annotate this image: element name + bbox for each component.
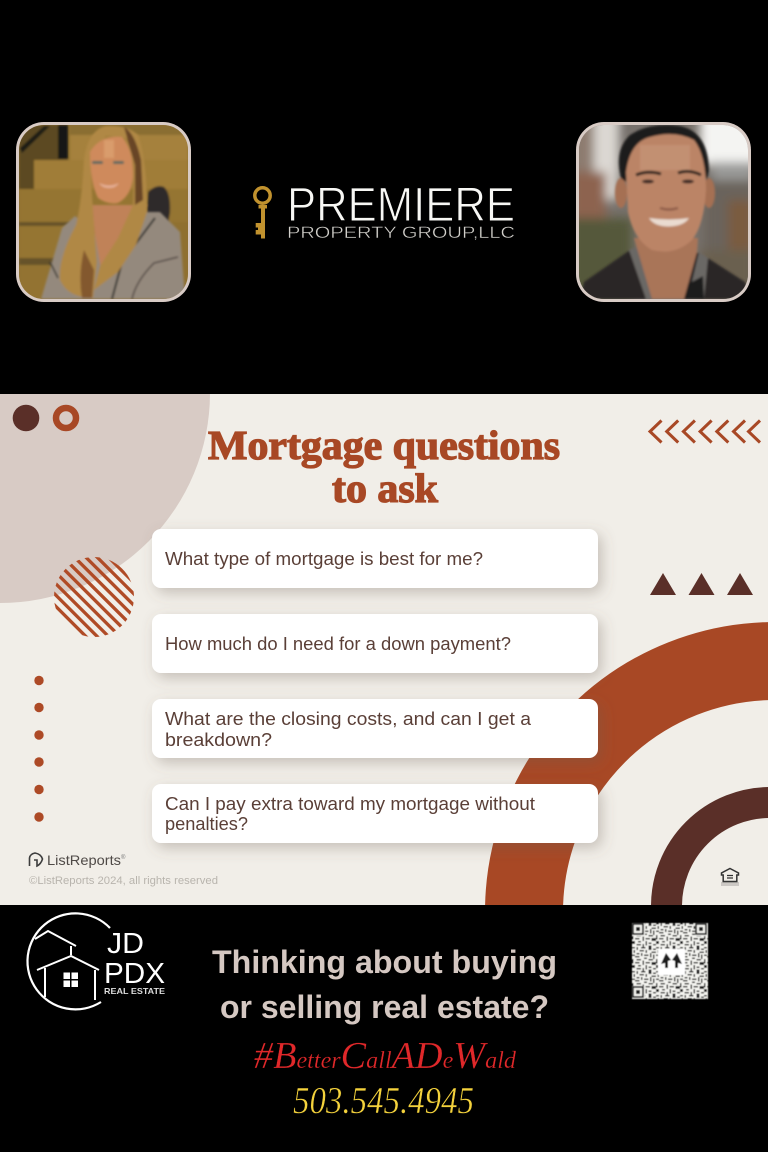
ListReports brand: ® [121,854,126,861]
question card 3: breakdown? [165,730,272,750]
decoration: ring [56,408,76,428]
sweater [41,212,185,299]
question card 4 [152,784,598,843]
phone number: 503.545.4945 [293,1080,474,1122]
logo: JD PDX Real Estate: PDX [104,958,165,990]
logo: Premiere Property Group: PROPERTY GROUP,LLC [287,224,515,242]
question card 4: penalties? [165,814,248,834]
call to action heading [212,944,557,1025]
ListReports brand: ListReports [47,852,121,868]
question card 3: What are the closing costs, and can I get a [165,709,532,729]
title: Mortgage questions [208,422,560,468]
decoration: large pink circle [0,394,210,603]
logo: JD PDX Real Estate: REAL ESTATE [104,986,165,996]
jacket [580,250,750,299]
photo: woman agent portrait [16,122,191,302]
call to action heading: Thinking about buying [212,944,557,980]
chest [92,205,148,270]
icon: gold key [255,188,270,238]
question card 3 [152,699,598,758]
icon: window [64,972,78,987]
question card 2: How much do I need for a down payment? [165,634,511,654]
question card 1 [152,529,598,588]
centre badge [658,949,685,975]
photo: man agent portrait [576,122,751,302]
question card 1: What type of mortgage is best for me? [165,549,483,569]
decoration: striped circle [54,557,134,637]
decoration: vertical dots [34,676,44,822]
question card 4: Can I pay extra toward my mortgage without [165,794,535,814]
hashtag: #BetterCallADeWald [254,1035,517,1077]
logo: JD PDX Real Estate: JD [107,928,144,960]
decoration: chevrons [650,420,760,442]
QR code [632,923,708,999]
call to action heading: or selling real estate? [220,989,549,1025]
logo: JD PDX Real Estate [27,913,165,1009]
neck [634,238,698,299]
copyright: ©ListReports 2024, all rights reserved [29,875,218,887]
face [626,134,706,252]
finder squares [632,923,708,999]
decoration: dark arc [651,787,768,905]
face [90,137,133,203]
icon: equal housing [721,868,739,885]
logo: Premiere Property Group [255,179,515,242]
title [208,422,560,511]
decoration: brown arc [485,622,768,905]
title: to ask [332,465,438,511]
shirt [629,244,708,299]
ears [615,178,627,208]
hair [60,126,147,298]
logo: Premiere Property Group: PREMIERE [287,179,515,232]
question card 2 [152,614,598,673]
hair [619,125,709,182]
decoration: triangles [650,573,753,595]
panel: mortgage questions [0,394,768,905]
decoration: dark dot [13,405,39,431]
